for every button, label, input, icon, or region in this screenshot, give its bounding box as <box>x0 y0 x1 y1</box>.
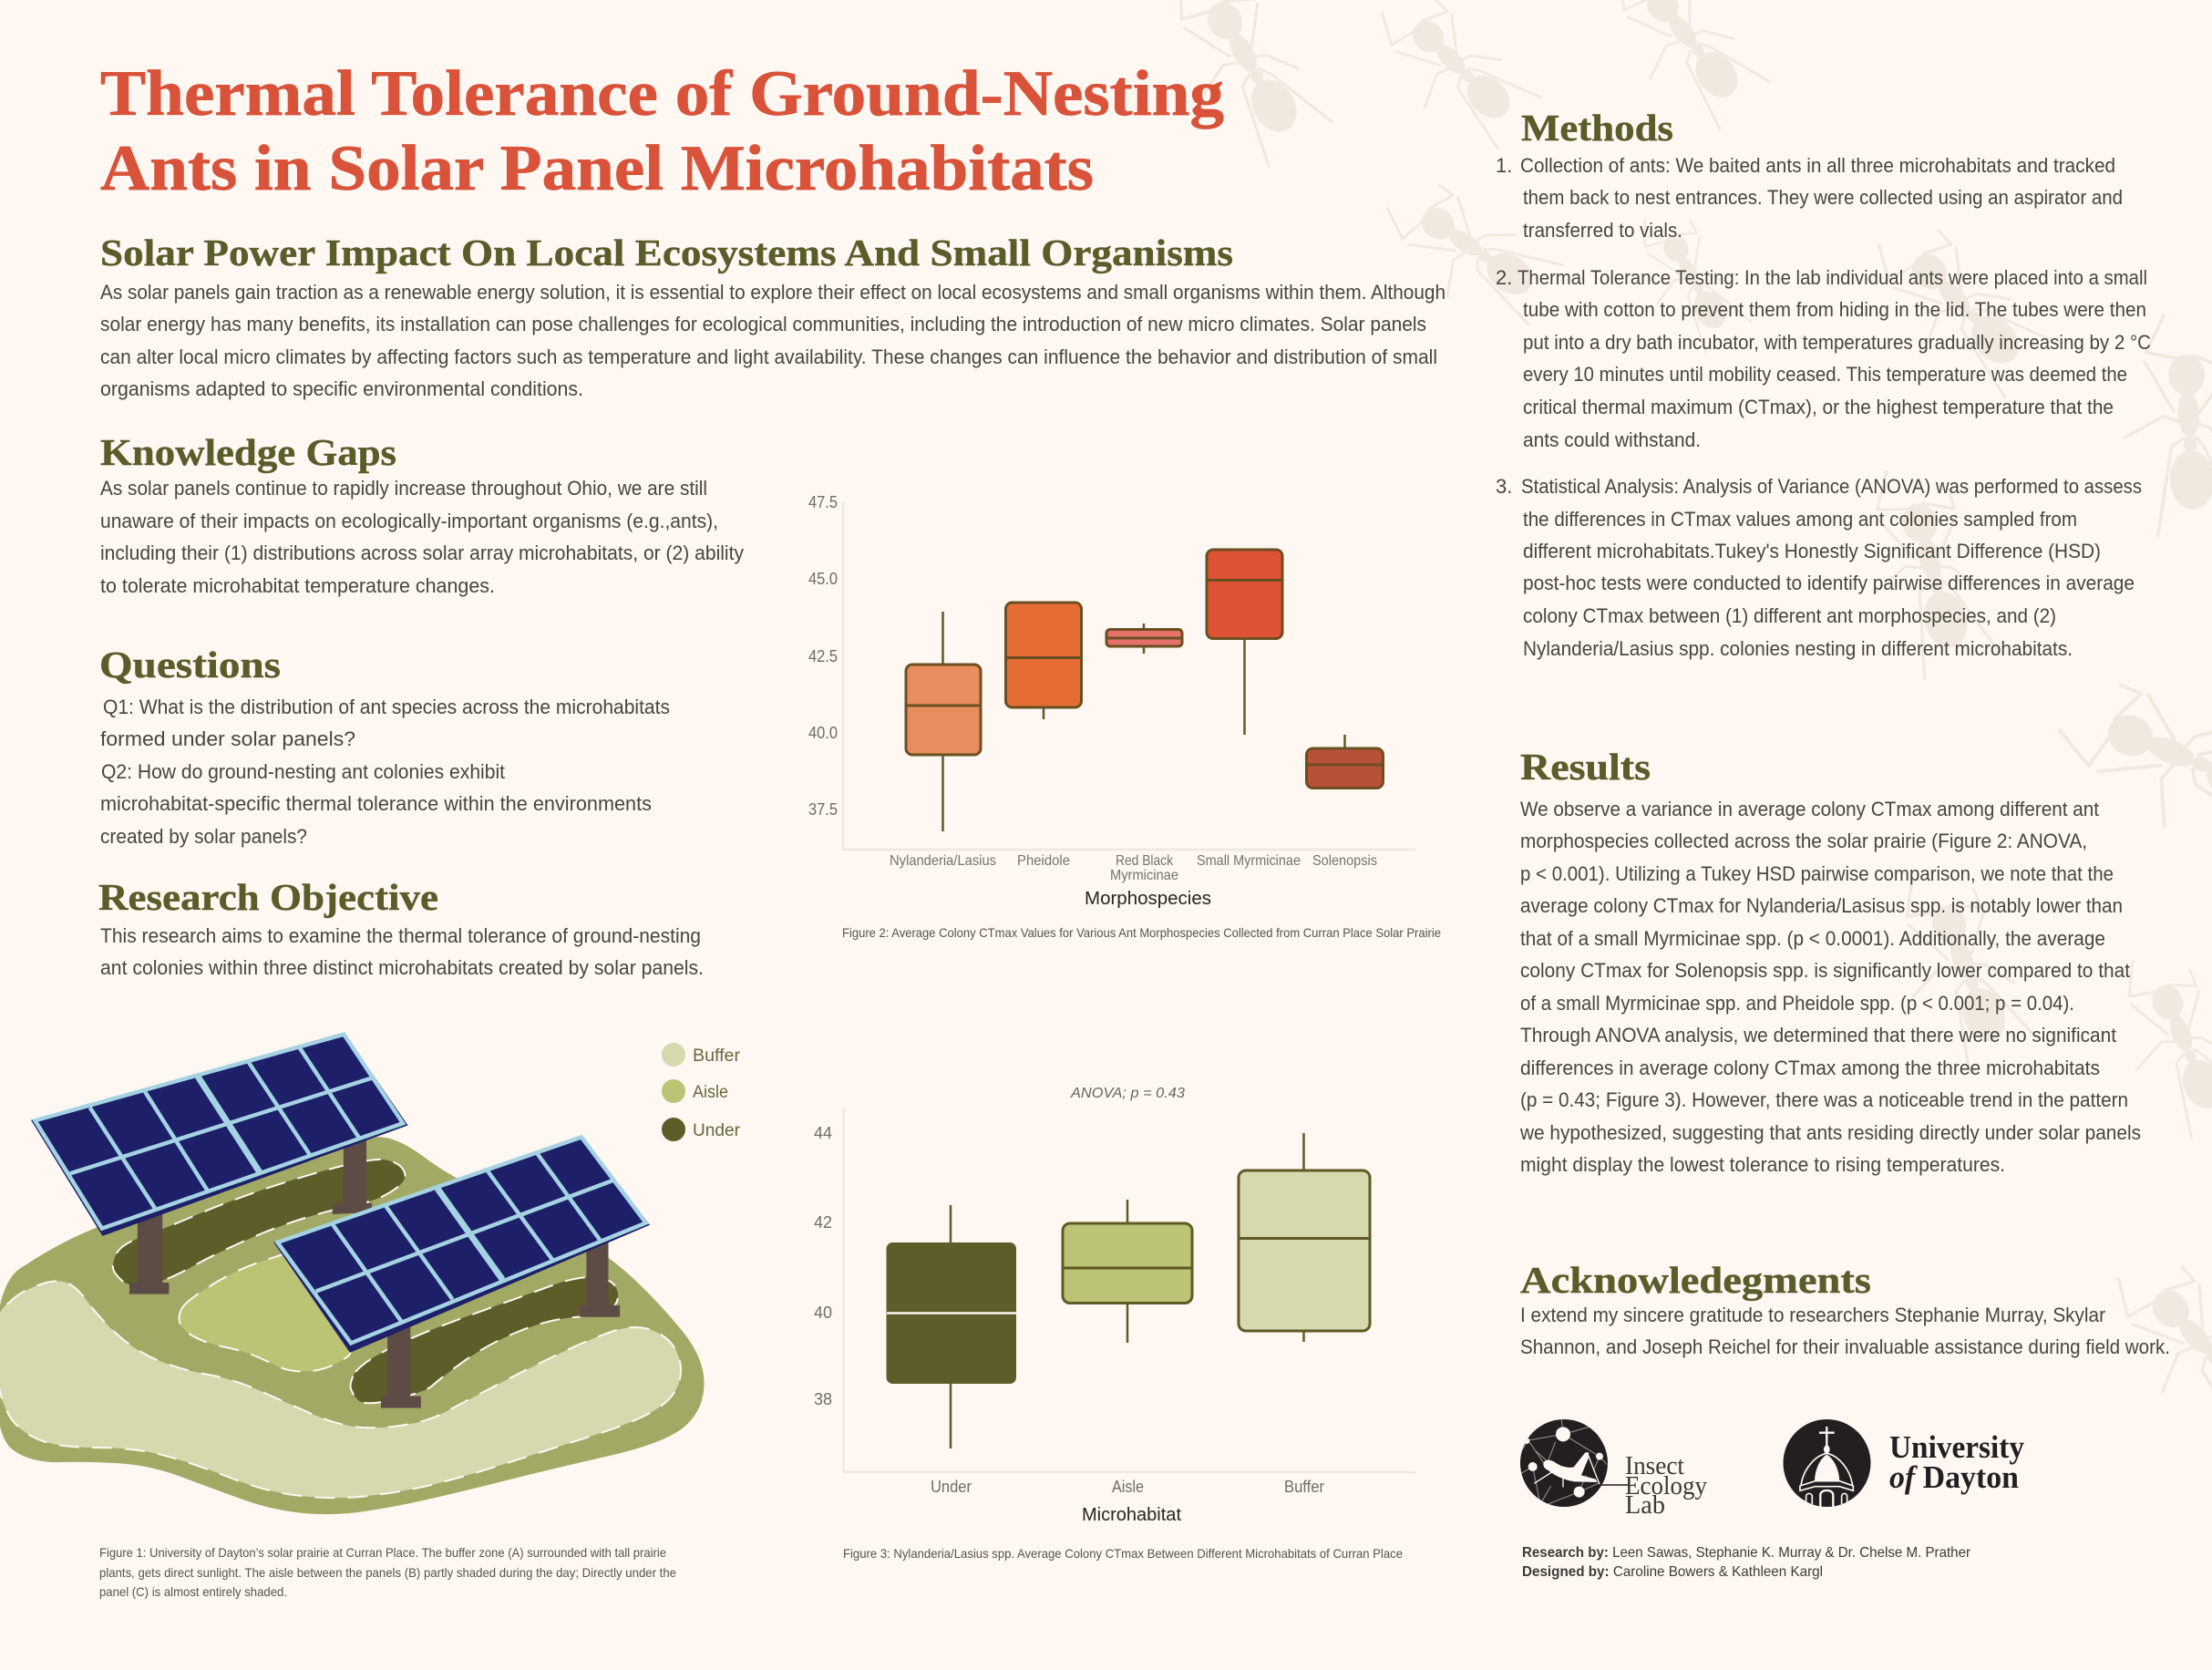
x axis title: Microhabitat <box>1082 1505 1181 1525</box>
text block: methods: different microhabitats.Tukey's Honestly Significant Difference (HSD) <box>1523 540 2101 562</box>
text block: methods: 1. <box>1496 154 1512 177</box>
text block: acknowledgments: I extend my sincere gratitude to researchers Stephanie Murray, Skylar <box>1520 1304 2105 1326</box>
y axis ticks: 45.0 <box>808 570 838 588</box>
text block: results: (p = 0.43; Figure 3). However, there was a noticeable trend in the pattern <box>1520 1088 2128 1111</box>
text block: results: We observe a variance in average colony CTmax among different ant <box>1520 798 2099 820</box>
y axis ticks: 42 <box>814 1213 832 1232</box>
text block: knowledge gaps: unaware of their impacts on ecologically-important organisms (e.g.,ants), <box>100 510 718 532</box>
chart: figure 3 microhabitat box plot <box>814 1086 1415 1525</box>
text block: questions: Q2: How do ground-nesting ant colonies exhibit <box>101 760 505 783</box>
text block: methods: put into a dry bath incubator, with temperatures gradually increasing by 2 °C <box>1523 331 2151 354</box>
text block: introduction <box>100 281 1446 400</box>
logo: Insect Ecology Lab: Lab <box>1625 1491 1665 1520</box>
x axis labels: Buffer <box>1284 1478 1324 1496</box>
x axis title: Morphospecies <box>1085 889 1211 909</box>
figure 1 caption: plants, gets direct sunlight. The aisle between the panels (B) partly shaded during the day; Directly under the <box>99 1565 676 1580</box>
text block: questions: microhabitat-specific thermal tolerance within the environments <box>100 792 652 815</box>
text block: methods: them back to nest entrances. They were collected using an aspirator and <box>1523 186 2123 209</box>
panel posts <box>129 1139 620 1408</box>
text block: results: that of a small Myrmicinae spp. (p < 0.0001). Additionally, the average <box>1520 927 2105 950</box>
text block: introduction: organisms adapted to specific environmental conditions. <box>100 377 583 400</box>
figure 1 caption: panel (C) is almost entirely shaded. <box>99 1584 287 1599</box>
illustration: solar panels and microhabitats <box>0 1033 705 1514</box>
text block: questions: formed under solar panels? <box>100 727 355 750</box>
box: Pheidole <box>1006 603 1081 719</box>
x axis labels: Under <box>931 1478 972 1496</box>
ground <box>0 1137 705 1514</box>
text block: questions: Q1: What is the distribution of ant species across the microhabitats <box>103 696 670 718</box>
text block: introduction: can alter local micro climates by affecting factors such as temperature and light availability. These changes can influence the behavior and distribution of small <box>100 345 1437 368</box>
y axis ticks: 42.5 <box>808 647 838 665</box>
text block: introduction: solar energy has many benefits, its installation can pose challenges for ecological communities, including the introduction of new micro climates. Solar panels <box>100 313 1426 335</box>
text block: methods: Collection of ants: We baited ants in all three microhabitats and tracked <box>1520 154 2115 177</box>
text block: methods: Thermal Tolerance Testing: In the lab individual ants were placed into a small <box>1518 266 2147 289</box>
text block: results: Through ANOVA analysis, we determined that there were no significant <box>1520 1024 2116 1046</box>
text block: results: we hypothesized, suggesting that ants residing directly under solar panels <box>1519 1121 2141 1144</box>
title <box>100 58 1224 204</box>
text block: questions <box>100 696 670 848</box>
logo: Insect Ecology Lab <box>1520 1419 1707 1520</box>
y axis ticks: 40 <box>814 1304 832 1322</box>
text block: results: colony CTmax for Solenopsis spp. is significantly lower compared to that <box>1520 959 2130 982</box>
y axis ticks: 37.5 <box>808 800 838 819</box>
text block: methods: transferred to vials. <box>1523 219 1682 242</box>
logo: Insect Ecology Lab: Insect <box>1625 1452 1684 1480</box>
text block: results: differences in average colony CTmax among the three microhabitats <box>1520 1057 2100 1079</box>
text block: results <box>1519 798 2141 1176</box>
text block: knowledge gaps: As solar panels continue to rapidly increase throughout Ohio, we are still <box>100 477 707 500</box>
buffer zone <box>0 1281 681 1498</box>
text block: acknowledgments <box>1520 1304 2170 1358</box>
x axis labels: Solenopsis <box>1312 853 1377 869</box>
x axis labels <box>931 1478 1324 1496</box>
x axis labels: Small Myrmicinae <box>1197 853 1301 869</box>
text block: methods: 2. <box>1496 266 1512 289</box>
logo: University of Dayton: University <box>1889 1429 2024 1465</box>
text block: knowledge gaps: to tolerate microhabitat temperature changes. <box>100 574 495 597</box>
background ant silhouettes <box>1144 0 2212 1461</box>
figure 1 caption: Figure 1: University of Dayton’s solar prairie at Curran Place. The buffer zone (A) surrounded with tall prairie <box>99 1545 666 1560</box>
solar panel, rear <box>31 1033 408 1236</box>
legend: microhabitats: Buffer <box>693 1046 741 1066</box>
title: Ants in Solar Panel Microhabitats <box>100 133 1094 204</box>
chart: figure 2 morphospecies box plot <box>808 493 1415 909</box>
connector line <box>1598 1484 1628 1486</box>
heading: acknowledgments: Acknowledegments <box>1520 1259 1871 1301</box>
y axis ticks: 44 <box>814 1124 832 1142</box>
text block: results: p < 0.001). Utilizing a Tukey HSD pairwise comparison, we note that the <box>1520 862 2114 885</box>
credits <box>1522 1545 1971 1580</box>
text block: knowledge gaps <box>100 477 744 597</box>
text block: methods: post-hoc tests were conducted to identify pairwise differences in average <box>1523 572 2135 594</box>
heading: research objective: Research Objective <box>98 876 438 918</box>
figure 1 caption <box>99 1545 676 1599</box>
box: Buffer <box>1239 1133 1370 1342</box>
box: Red Black Myrmicinae <box>1106 624 1182 654</box>
box: Aisle <box>1063 1200 1192 1343</box>
y axis ticks <box>808 493 838 819</box>
text block: knowledge gaps: including their (1) distributions across solar array microhabitats, or (2) ability <box>100 541 744 564</box>
x axis labels: Pheidole <box>1017 853 1070 869</box>
text block: methods: the differences in CTmax values among ant colonies sampled from <box>1523 508 2077 531</box>
x axis labels: Aisle <box>1112 1478 1144 1496</box>
legend: microhabitats: Aisle <box>693 1083 728 1102</box>
text block: results: average colony CTmax for Nylanderia/Lasisus spp. is notably lower than <box>1520 894 2123 917</box>
text block: methods: Nylanderia/Lasius spp. colonies nesting in different microhabitats. <box>1523 637 2073 660</box>
figure 2 caption: Figure 2: Average Colony CTmax Values for Various Ant Morphospecies Collected from Curran Place Solar Prairie <box>842 925 1441 940</box>
logo: University of Dayton: of Dayton <box>1889 1459 2019 1495</box>
text block: acknowledgments: Shannon, and Joseph Reichel for their invaluable assistance during field work. <box>1520 1335 2170 1358</box>
figure 3 caption: Figure 3: Nylanderia/Lasius spp. Average Colony CTmax Between Different Microhabitats of Curran Place <box>843 1546 1403 1561</box>
text block: introduction: As solar panels gain traction as a renewable energy solution, it is essential to explore their effect on local ecosystems and small organisms within them. Although <box>100 281 1446 304</box>
heading: knowledge gaps: Knowledge Gaps <box>100 431 396 473</box>
text block: methods: tube with cotton to prevent them from hiding in the lid. The tubes were then <box>1523 298 2146 321</box>
text block: methods: critical thermal maximum (CTmax), or the highest temperature that the <box>1523 396 2114 418</box>
box: Solenopsis <box>1307 735 1384 788</box>
text block: methods: every 10 minutes until mobility ceased. This temperature was deemed the <box>1523 363 2127 386</box>
title: Thermal Tolerance of Ground-Nesting <box>100 58 1224 129</box>
y axis ticks: 38 <box>814 1390 832 1408</box>
credits: Designed by: Caroline Bowers & Kathleen Kargl <box>1522 1564 1823 1580</box>
text block: research objective <box>100 924 704 979</box>
y axis ticks: 40.0 <box>808 724 838 742</box>
x axis labels: Myrmicinae <box>1110 868 1178 883</box>
x axis labels: Red Black <box>1116 853 1174 869</box>
legend: microhabitats <box>662 1043 741 1141</box>
text block: results: of a small Myrmicinae spp. and Pheidole spp. (p < 0.001; p = 0.04). <box>1520 992 2074 1015</box>
box: Nylanderia/Lasius <box>906 612 981 831</box>
heading: questions: Questions <box>99 644 281 686</box>
text block: methods <box>1496 154 2151 660</box>
text block: methods: colony CTmax between (1) different ant morphospecies, and (2) <box>1523 604 2056 627</box>
logo: University of Dayton <box>1783 1419 2024 1507</box>
text block: research objective: This research aims to examine the thermal tolerance of ground-nesting <box>100 924 701 947</box>
box: Under <box>886 1205 1016 1448</box>
solar panel, front <box>273 1135 650 1353</box>
heading: results: Results <box>1520 746 1651 788</box>
legend: microhabitats: Under <box>693 1121 741 1140</box>
heading: methods: Methods <box>1521 107 1673 149</box>
aisle zone <box>180 1244 365 1371</box>
panels and posts <box>31 1033 650 1408</box>
y axis ticks: 47.5 <box>808 493 838 511</box>
y axis ticks <box>814 1124 832 1408</box>
ANOVA annotation: ANOVA; p = 0.43 <box>1070 1086 1185 1101</box>
text block: results: might display the lowest tolerance to rising temperatures. <box>1520 1153 2005 1176</box>
x axis labels: Nylanderia/Lasius <box>890 853 996 869</box>
under zone, front row <box>351 1277 618 1403</box>
text block: research objective: ant colonies within three distinct microhabitats created by solar panels. <box>100 956 704 979</box>
x axis labels <box>890 853 1377 883</box>
text block: methods: ants could withstand. <box>1523 428 1701 451</box>
text block: questions: created by solar panels? <box>100 825 307 848</box>
text block: methods: 3. <box>1496 475 1512 498</box>
under zone, rear row <box>113 1160 405 1285</box>
heading: solar power impact: Solar Power Impact On Local Ecosystems And Small Organisms <box>100 232 1233 273</box>
text block: results: morphospecies collected across the solar prairie (Figure 2: ANOVA, <box>1520 830 2087 852</box>
text block: methods: Statistical Analysis: Analysis of Variance (ANOVA) was performed to assess <box>1521 475 2142 498</box>
logo: Insect Ecology Lab: Ecology <box>1625 1472 1707 1500</box>
credits: Research by: Leen Sawas, Stephanie K. Murray & Dr. Chelse M. Prather <box>1522 1545 1971 1561</box>
box: Small Myrmicinae <box>1207 550 1282 735</box>
